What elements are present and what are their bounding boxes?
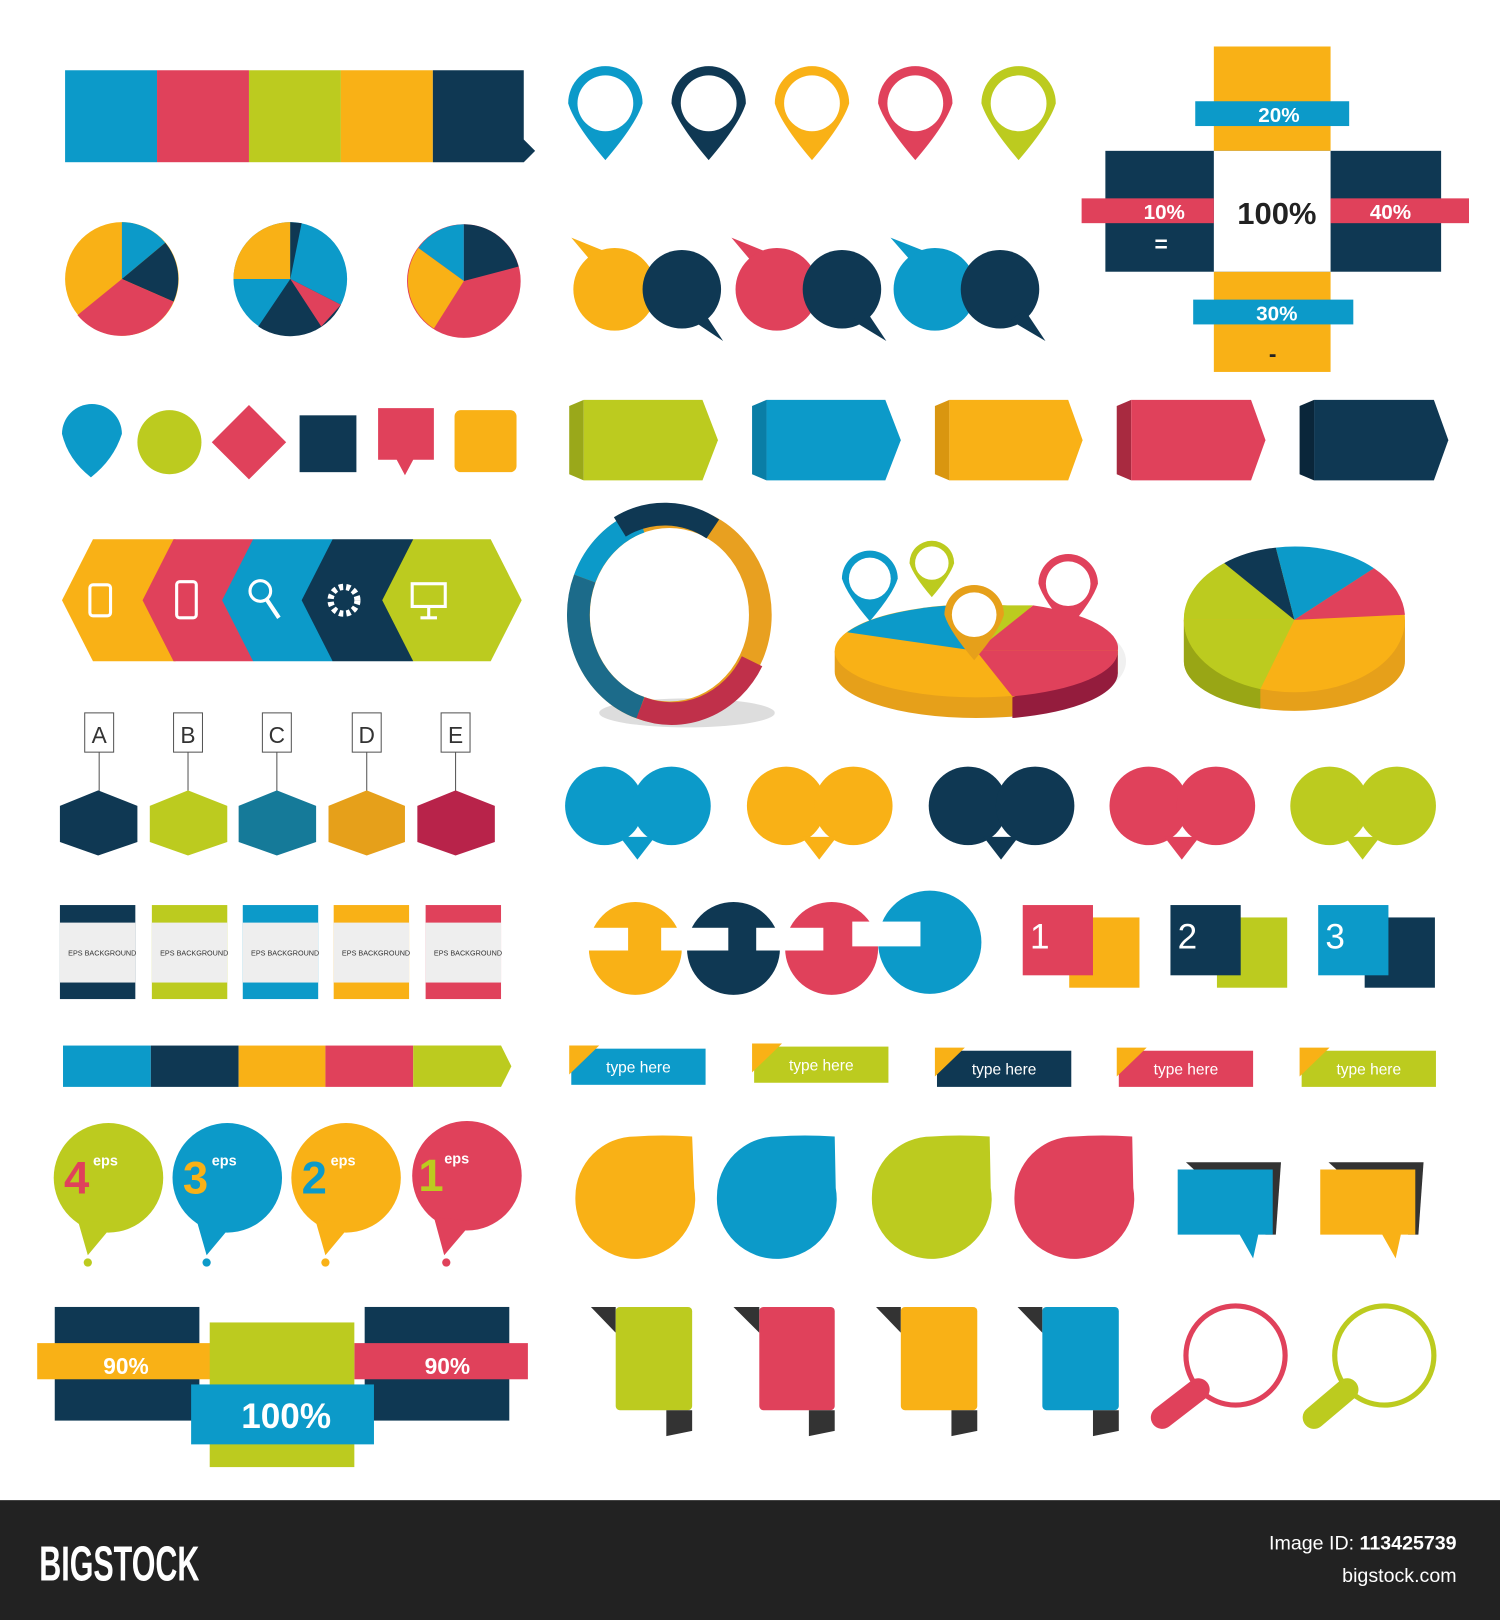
numbered balloons: eps [93, 1153, 118, 1169]
arrow banners [569, 400, 1448, 480]
blob shapes [575, 1135, 1424, 1259]
cross percentage chart: 100% [1237, 196, 1316, 231]
small shapes row [62, 404, 517, 479]
3D pie with pins [835, 541, 1126, 718]
hexagon process [62, 539, 522, 661]
footer bar [0, 1500, 1500, 1620]
chain circles [566, 891, 981, 995]
cross percentage chart: 20% [1258, 104, 1300, 127]
numbered cards [60, 905, 502, 999]
numbered cards: EPS BACKGROUND [434, 949, 502, 958]
numbered squares: 2 [1178, 917, 1197, 956]
speech bubble pairs [571, 238, 1045, 341]
segment arrow bar [63, 1046, 511, 1087]
cross percentage chart: 30% [1256, 302, 1298, 325]
numbered cards: EPS BACKGROUND [68, 949, 136, 958]
type here labels: type here [606, 1059, 671, 1076]
labelled boxes A-E: A [92, 722, 108, 748]
percentage ribbon [37, 1307, 528, 1467]
footer bar: Image ID: 113425739 [1269, 1533, 1457, 1555]
numbered cards: EPS BACKGROUND [251, 949, 319, 958]
numbered balloons: eps [212, 1153, 237, 1169]
numbered balloons: eps [331, 1153, 355, 1169]
cross percentage chart: 40% [1370, 201, 1411, 224]
labelled boxes A-E: D [359, 722, 375, 748]
numbered balloons: 1 [418, 1150, 444, 1201]
cross percentage chart [1082, 46, 1469, 372]
numbered balloons [54, 1121, 522, 1267]
type here labels: type here [1154, 1061, 1218, 1078]
numbered cards: EPS BACKGROUND [342, 949, 410, 958]
magnifier rings [1162, 1306, 1434, 1418]
cloud speech bubbles [565, 767, 1436, 860]
type here labels: type here [972, 1061, 1036, 1078]
numbered cards: EPS BACKGROUND [160, 949, 228, 958]
numbered squares: 1 [1030, 917, 1049, 956]
labelled boxes A-E: B [180, 722, 196, 748]
map pins [568, 66, 1056, 160]
labelled boxes A-E [60, 713, 495, 855]
3D pie chart [1184, 546, 1405, 711]
footer bar: bigstock.com [1342, 1565, 1457, 1587]
footer bar: BIGSTOCK [39, 1536, 199, 1592]
percentage ribbon: 100% [241, 1397, 331, 1436]
numbered balloons: 2 [302, 1152, 327, 1203]
cross percentage chart: - [1269, 341, 1277, 367]
percentage ribbon: 90% [103, 1353, 149, 1379]
labelled boxes A-E: E [448, 722, 463, 748]
percentage ribbon: 90% [425, 1353, 470, 1379]
cross percentage chart: = [1155, 231, 1168, 257]
numbered balloons: 4 [64, 1152, 90, 1203]
type here labels: type here [1337, 1061, 1401, 1078]
numbered squares [1023, 905, 1435, 988]
labelled boxes A-E: C [269, 722, 285, 748]
numbered squares: 3 [1325, 917, 1345, 956]
type here labels: type here [789, 1057, 854, 1074]
pie charts [65, 222, 521, 338]
step squares bar [65, 70, 535, 162]
cross percentage chart: 10% [1144, 201, 1185, 224]
3D ring [578, 514, 775, 727]
type here labels [569, 1043, 1436, 1087]
bookmark tags [591, 1307, 1119, 1436]
numbered balloons: 3 [183, 1152, 208, 1203]
numbered balloons: eps [444, 1151, 469, 1167]
